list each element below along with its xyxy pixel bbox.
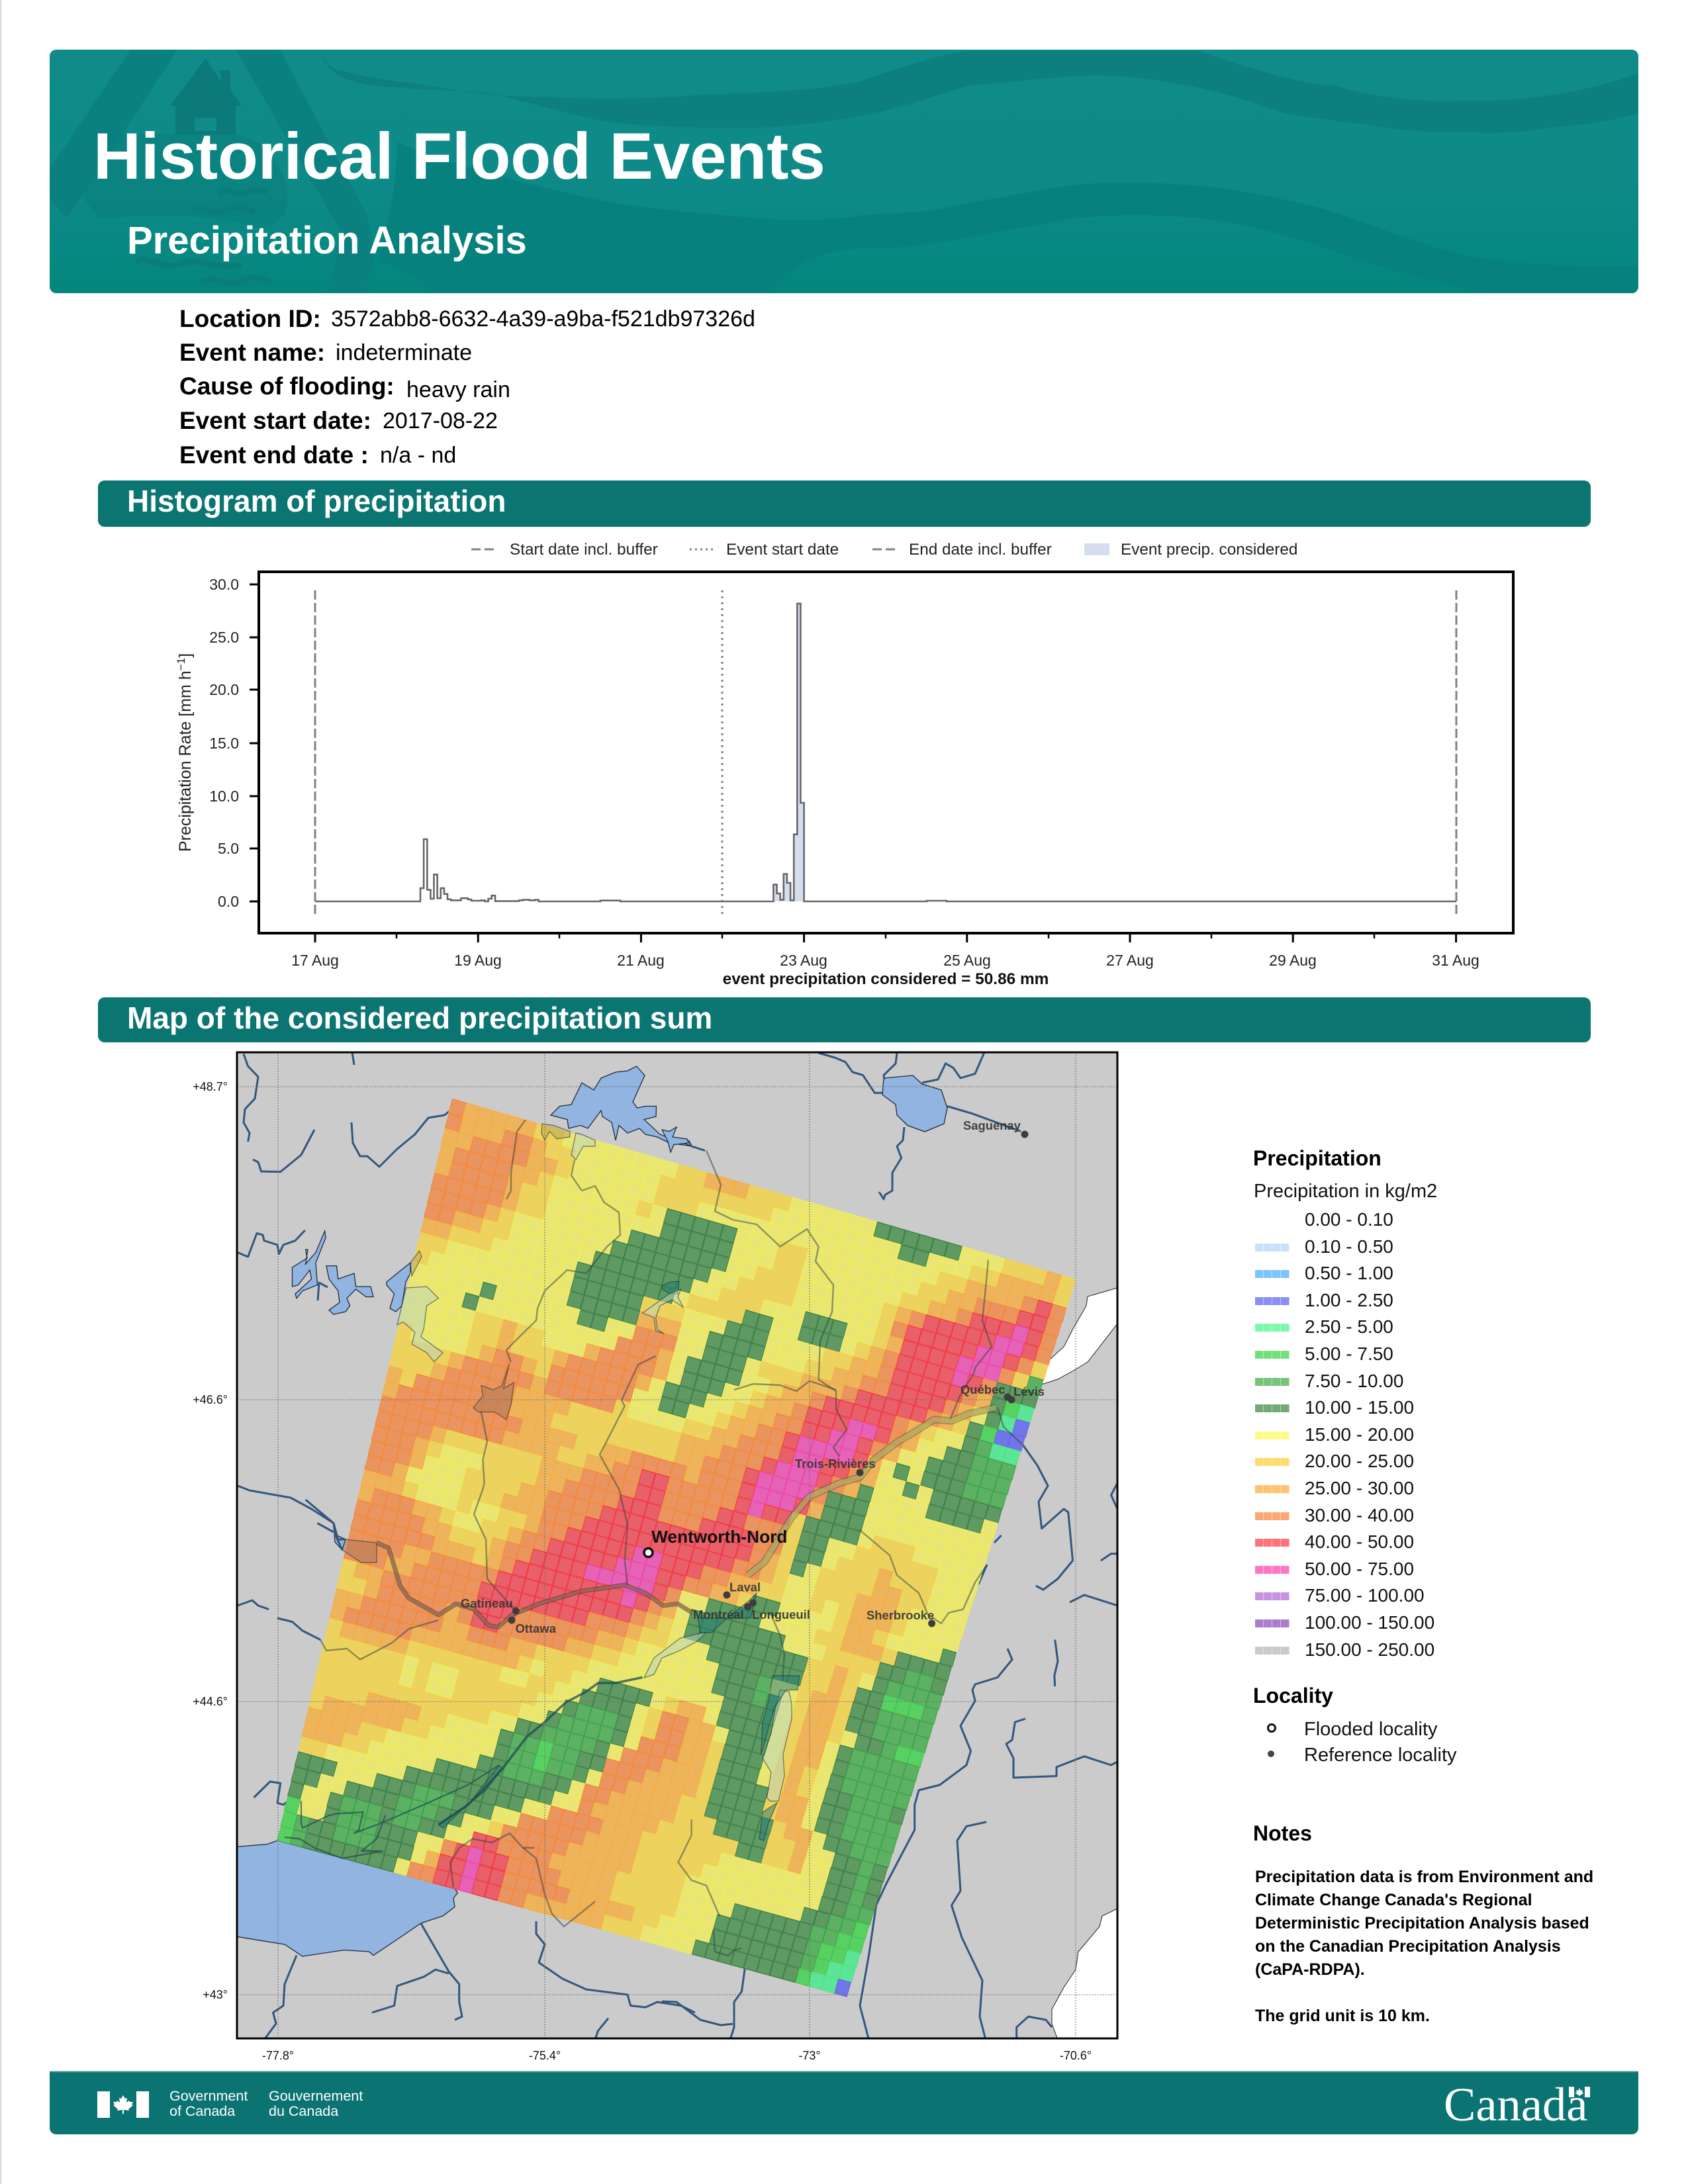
reference locality labels: Sherbrooke — [867, 1608, 934, 1622]
legend classes: 150.00 - 250.00 — [1305, 1639, 1434, 1660]
reference locality key: Reference locality — [1304, 1745, 1456, 1766]
reference locality labels: Ottawa — [515, 1621, 557, 1635]
wordmark french — [269, 2088, 363, 2119]
flooded locality label: Wentworth-Nord — [651, 1527, 787, 1547]
longitude labels: -73° — [798, 2049, 821, 2062]
precipitation map — [193, 1051, 1119, 2062]
wordmark french: du Canada — [269, 2103, 338, 2119]
y axis ticks and labels — [209, 576, 259, 910]
reference locality labels: Saguenay — [963, 1118, 1021, 1132]
legend classes: 75.00 - 100.00 — [1305, 1585, 1425, 1606]
lakes seen through the grid — [342, 1124, 800, 1841]
legend classes: 7.50 - 10.00 — [1305, 1371, 1403, 1391]
y axis ticks and labels: 30.0 — [209, 576, 239, 593]
latitude labels: +48.7° — [193, 1080, 228, 1093]
legend classes: 0.10 - 0.50 — [1305, 1236, 1393, 1257]
map frame — [237, 1052, 1117, 2038]
title: Historical Flood Events — [93, 120, 825, 193]
Ottawa River — [377, 1543, 692, 1627]
event start date — [179, 407, 498, 434]
y axis ticks and labels: 25.0 — [209, 629, 239, 646]
legend classes: 0.00 - 0.10 — [1305, 1209, 1393, 1230]
latitude labels — [193, 1080, 228, 2001]
section heading: map: Map of the considered precipitation sum — [127, 1001, 712, 1035]
rivers outside the grid — [238, 1052, 1117, 2040]
cause of flooding — [179, 373, 510, 402]
y axis ticks and labels: 0.0 — [218, 893, 239, 910]
event metadata: 2017-08-22 — [383, 408, 498, 433]
buffer end line — [1455, 590, 1458, 917]
notes heading: Notes — [1253, 1821, 1312, 1845]
St Lawrence River — [285, 1408, 996, 1858]
legend classes: 15.00 - 20.00 — [1305, 1424, 1414, 1445]
legend classes — [1255, 1209, 1434, 1660]
chart legend — [471, 541, 1297, 559]
header banner — [50, 50, 1638, 293]
lakes outside the grid — [232, 1066, 947, 1956]
y axis ticks and labels: 5.0 — [218, 840, 239, 857]
y axis ticks and labels: 20.0 — [209, 681, 239, 698]
legend heading: precipitation: Precipitation — [1253, 1146, 1382, 1170]
histogram chart — [175, 541, 1515, 988]
notes text: Deterministic Precipitation Analysis based — [1255, 1914, 1589, 1933]
event metadata: heavy rain — [406, 377, 510, 402]
wordmark french: Gouvernement — [269, 2088, 363, 2104]
event end date: Event end date : — [179, 441, 369, 469]
graticule — [237, 1052, 1117, 2038]
x axis ticks and labels: 17 Aug — [291, 952, 339, 969]
legend classes: 30.00 - 40.00 — [1305, 1505, 1414, 1525]
event start date: Event start date: — [179, 407, 371, 434]
notes text: (CaPA-RDPA). — [1255, 1960, 1365, 1979]
reference locality labels: Montréal — [693, 1608, 744, 1621]
legend classes: 50.00 - 75.00 — [1305, 1559, 1414, 1579]
notes text: on the Canadian Precipitation Analysis — [1255, 1937, 1561, 1956]
legend classes: 2.50 - 5.00 — [1305, 1316, 1393, 1337]
page edge line — [0, 0, 1, 2184]
reference locality dots — [508, 1130, 1029, 1627]
event precipitation fill — [773, 604, 804, 901]
event metadata: 3572abb8-6632-4a39-a9ba-f521db97326d — [331, 306, 755, 332]
location id: Location ID: — [179, 305, 321, 332]
x axis ticks and labels: 21 Aug — [617, 952, 665, 969]
map land background — [237, 1052, 1117, 2038]
legend classes: 1.00 - 2.50 — [1305, 1290, 1393, 1310]
banner background with waves and flood logo — [50, 50, 1638, 293]
government flag symbol — [97, 2091, 149, 2118]
legend classes: 100.00 - 150.00 — [1305, 1612, 1434, 1633]
event end date — [179, 441, 456, 469]
ocean: St Lawrence estuary — [1039, 1288, 1117, 1385]
cause of flooding: Cause of flooding: — [179, 373, 395, 400]
reference locality labels: Lévis — [1013, 1385, 1045, 1398]
footer bar — [50, 2071, 1638, 2134]
chart legend: Event precip. considered — [1121, 541, 1297, 559]
latitude labels: +46.6° — [193, 1393, 228, 1406]
chart legend: End date incl. buffer — [909, 541, 1052, 559]
chart legend: Event start date — [726, 541, 839, 559]
section heading: histogram — [98, 480, 1591, 527]
wordmark english: Government — [169, 2088, 248, 2104]
event metadata: n/a - nd — [380, 443, 456, 468]
x axis ticks and labels: 25 Aug — [943, 952, 991, 969]
x axis ticks and labels: 27 Aug — [1106, 952, 1154, 969]
Canada wordmark: Canada — [1444, 2077, 1587, 2131]
wordmark flag — [1569, 2087, 1590, 2097]
reference locality labels: Laval — [729, 1580, 761, 1594]
notes text: Precipitation data is from Environment and — [1255, 1868, 1593, 1886]
reference locality labels — [461, 1118, 1045, 1635]
chart legend: Start date incl. buffer — [510, 541, 658, 559]
event metadata — [179, 305, 755, 469]
x axis ticks and labels: 19 Aug — [454, 952, 502, 969]
section heading: map — [98, 997, 1591, 1042]
flooded locality key: Flooded locality — [1304, 1719, 1438, 1740]
flooded locality marker — [644, 1549, 653, 1557]
reference locality labels: Québec — [961, 1383, 1005, 1396]
longitude labels: -70.6° — [1060, 2049, 1092, 2062]
event start line — [722, 590, 723, 917]
y axis title: Precipitation Rate [mm h−1] — [175, 653, 195, 852]
legend classes: 0.50 - 1.00 — [1305, 1263, 1393, 1283]
wordmark english: of Canada — [169, 2103, 235, 2119]
legend subheading: Precipitation in kg/m2 — [1254, 1181, 1437, 1202]
longitude labels — [262, 2049, 1092, 2062]
section heading: histogram: Histogram of precipitation — [127, 484, 506, 518]
location id — [179, 305, 755, 332]
longitude labels: -77.8° — [262, 2049, 294, 2062]
legend heading: locality: Locality — [1253, 1684, 1333, 1707]
legend classes: 5.00 - 7.50 — [1305, 1343, 1393, 1364]
precipitation trace — [315, 604, 1456, 901]
ocean: Atlantic corner — [1052, 1909, 1117, 2040]
event metadata: indeterminate — [336, 340, 472, 365]
y axis ticks and labels: 10.0 — [209, 788, 239, 805]
event name — [179, 339, 472, 366]
notes text: The grid unit is 10 km. — [1255, 2007, 1430, 2025]
reference locality labels: Gatineau — [461, 1596, 513, 1610]
longitude labels: -75.4° — [529, 2049, 561, 2062]
event name: Event name: — [179, 339, 325, 366]
precipitation grid — [279, 1106, 1074, 1989]
subtitle: Precipitation Analysis — [127, 219, 527, 262]
chart frame — [259, 572, 1513, 933]
buffer start line — [314, 590, 316, 917]
x axis ticks and labels: 29 Aug — [1269, 952, 1317, 969]
reference locality labels: Longueuil — [752, 1608, 810, 1621]
latitude labels: +44.6° — [193, 1695, 228, 1708]
y axis ticks and labels: 15.0 — [209, 735, 239, 752]
wordmark english — [169, 2088, 248, 2119]
reference locality labels: Trois-Rivières — [795, 1457, 876, 1471]
notes text: Climate Change Canada's Regional — [1255, 1891, 1532, 1909]
event precipitation caption: event precipitation considered = 50.86 mm — [723, 970, 1049, 988]
x axis ticks and labels — [291, 933, 1479, 969]
legend classes: 40.00 - 50.00 — [1305, 1531, 1414, 1552]
latitude labels: +43° — [203, 1988, 228, 2001]
rivers seen through the grid — [320, 1120, 1023, 1956]
x axis ticks and labels: 23 Aug — [780, 952, 827, 969]
legend classes: 20.00 - 25.00 — [1305, 1451, 1414, 1471]
legend classes: 10.00 - 15.00 — [1305, 1397, 1414, 1418]
legend classes: 25.00 - 30.00 — [1305, 1478, 1414, 1498]
notes text — [1255, 1868, 1593, 2025]
x axis ticks and labels: 31 Aug — [1432, 952, 1479, 969]
